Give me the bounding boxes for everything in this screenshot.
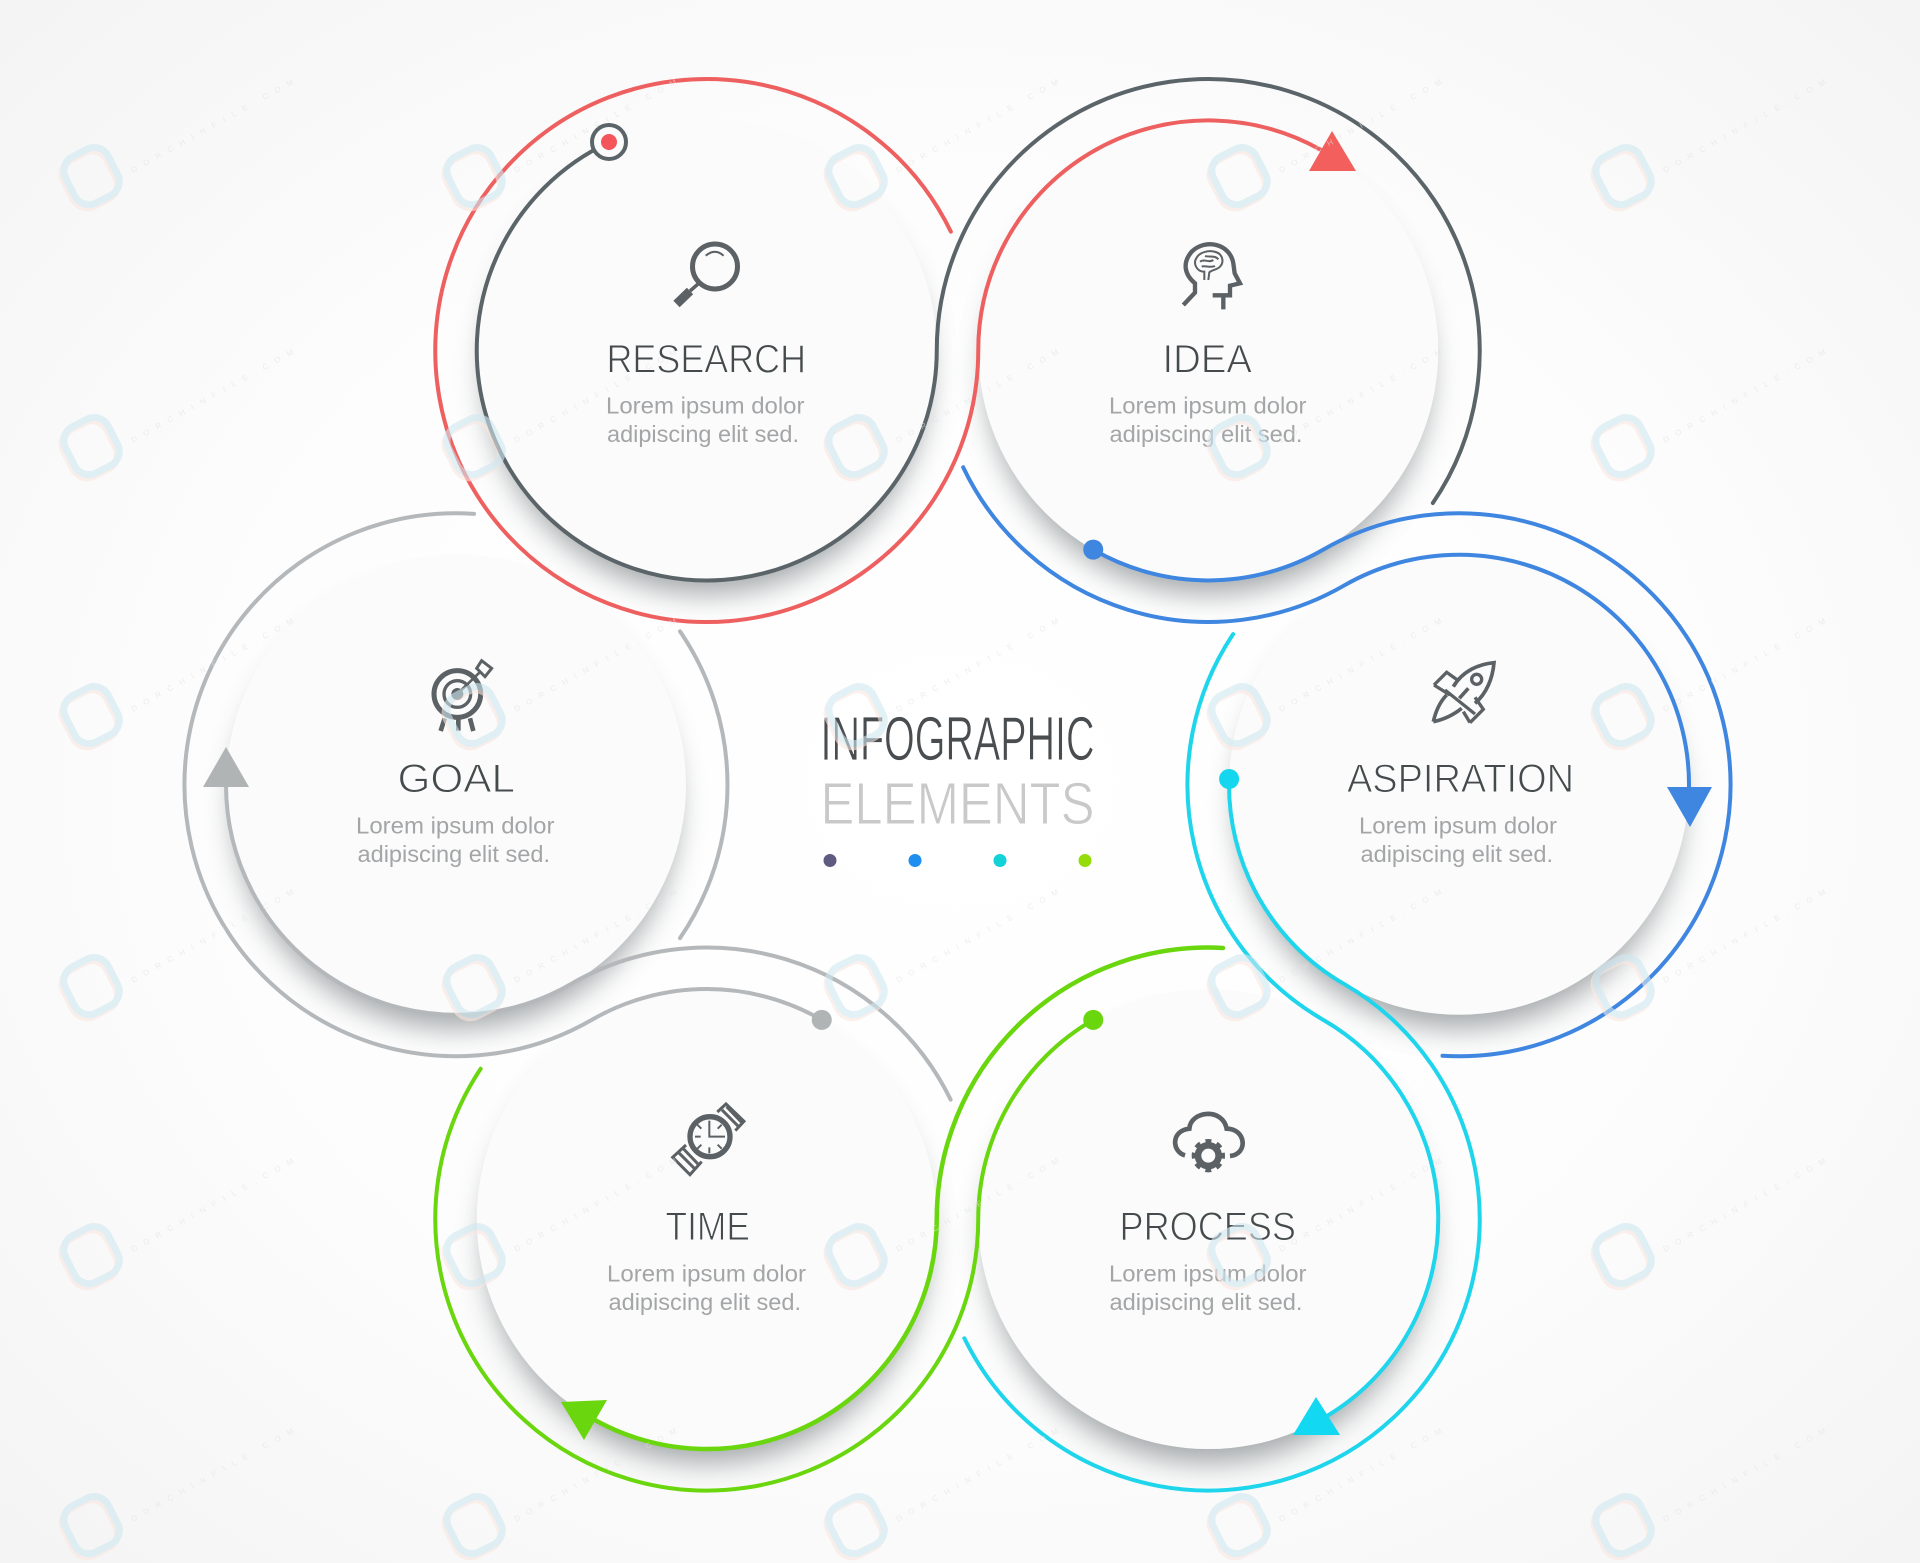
heading: goal: GOAL — [398, 757, 515, 801]
watermark grid: DORCHINFILE.COM — [130, 344, 302, 445]
marker: time start dot — [812, 1010, 832, 1030]
watermark grid: DORCHINFILE.COM — [895, 613, 1067, 714]
arrow: blue — [1667, 787, 1712, 827]
blue line: idea outer to aspiration inner — [963, 467, 1689, 790]
gray line: time inner to goal outer — [184, 513, 822, 1056]
watermark grid: DORCHINFILE.COM — [513, 884, 685, 985]
panel: idea — [1109, 244, 1307, 447]
disc: aspiration — [1229, 555, 1689, 1029]
panel: aspiration — [1347, 663, 1574, 867]
watermark grid: DORCHINFILE.COM — [130, 613, 302, 714]
text: time body: Lorem ipsum dolor — [607, 1261, 806, 1287]
heading: aspiration: ASPIRATION — [1347, 757, 1574, 801]
arrow: red — [1309, 131, 1356, 171]
watermark grid: DORCHINFILE.COM — [1662, 1153, 1834, 1254]
watermark grid: DORCHINFILE.COM — [895, 344, 1067, 445]
text: goal body: Lorem ipsum dolor — [356, 813, 555, 839]
heading: process: PROCESS — [1120, 1205, 1296, 1249]
icon: rocket — [1433, 663, 1494, 723]
watermark grid: DORCHINFILE.COM — [513, 344, 685, 445]
watermark grid: DORCHINFILE.COM — [513, 613, 685, 714]
disc: process — [978, 989, 1438, 1463]
marker: idea start dot — [1083, 540, 1103, 560]
panel: time — [607, 1104, 806, 1315]
blue line: idea inner to aspiration outer — [1093, 513, 1731, 1056]
watermark grid: DORCHINFILE.COM — [1662, 344, 1834, 445]
watermark grid: DORCHINFILE.COM — [1662, 1423, 1834, 1524]
watermark grid: DORCHINFILE.COM — [1278, 884, 1450, 985]
green line: process outer to time inner — [582, 948, 1223, 1449]
cyan line: aspiration outer to process inner — [1187, 634, 1438, 1415]
arrow: green — [561, 1400, 607, 1440]
center title — [820, 705, 1094, 867]
icon: magnifier — [676, 244, 738, 304]
watermark grid: DORCHINFILE.COM — [1662, 74, 1834, 175]
watermark grid: DORCHINFILE.COM — [130, 1153, 302, 1254]
watermark grid: DORCHINFILE.COM — [895, 1423, 1067, 1524]
watermark grid: DORCHINFILE.COM — [1662, 613, 1834, 714]
panel: research — [606, 244, 806, 447]
disc: time — [477, 989, 937, 1463]
disc: goal — [226, 555, 686, 1029]
panel: process — [1109, 1114, 1307, 1315]
gray arc: goal right side — [680, 631, 727, 938]
dark line: research inner to idea outer — [477, 79, 1480, 580]
watermark grid: DORCHINFILE.COM — [130, 884, 302, 985]
heading: time: TIME — [666, 1205, 750, 1249]
watermark grid: DORCHINFILE.COM — [130, 74, 302, 175]
text: idea body: Lorem ipsum dolor — [1109, 393, 1307, 419]
arrow: gray — [203, 747, 249, 787]
text: time body: adipiscing elit sed. — [608, 1289, 801, 1315]
cyan line: aspiration inner to process outer — [964, 779, 1480, 1491]
text: goal body: adipiscing elit sed. — [358, 841, 550, 867]
text: idea body: adipiscing elit sed. — [1110, 421, 1302, 447]
heading: research: RESEARCH — [606, 338, 806, 382]
watermark grid: DORCHINFILE.COM — [1278, 1153, 1450, 1254]
heading: elements: ELEMENTS — [820, 771, 1094, 837]
watermark grid: DORCHINFILE.COM — [1662, 884, 1834, 985]
watermark grid: DORCHINFILE.COM — [895, 74, 1067, 175]
red line: research outer to idea inner — [435, 79, 1320, 622]
watermark grid: DORCHINFILE.COM — [1278, 344, 1450, 445]
green line: process inner to time outer — [435, 1020, 1093, 1491]
heading: infographic: INFOGRAPHIC — [820, 705, 1094, 774]
icon: head with brain — [1183, 244, 1240, 309]
icon: wristwatch — [673, 1104, 744, 1175]
watermark grid: DORCHINFILE.COM — [513, 1423, 685, 1524]
gray line: time outer to goal inner — [226, 785, 951, 1100]
watermark grid: DORCHINFILE.COM — [895, 884, 1067, 985]
marker: process start dot — [1083, 1010, 1103, 1030]
disc: research — [477, 120, 937, 594]
watermark grid: DORCHINFILE.COM — [1278, 613, 1450, 714]
text: aspiration body: Lorem ipsum dolor — [1359, 813, 1557, 839]
marker: research start dot — [592, 125, 626, 159]
legend dots — [824, 854, 1092, 867]
marker: aspiration start dot — [1219, 769, 1239, 789]
panel: goal — [356, 661, 555, 867]
watermark grid: DORCHINFILE.COM — [1278, 74, 1450, 175]
text: research body: adipiscing elit sed. — [607, 421, 799, 447]
watermark grid: DORCHINFILE.COM — [513, 1153, 685, 1254]
icon: target with arrow — [434, 661, 492, 731]
arrow: cyan — [1293, 1397, 1340, 1435]
watermark grid: DORCHINFILE.COM — [895, 1153, 1067, 1254]
text: aspiration body: adipiscing elit sed. — [1360, 841, 1553, 867]
text: research body: Lorem ipsum dolor — [606, 393, 805, 419]
heading: idea: IDEA — [1162, 338, 1252, 382]
text: process body: Lorem ipsum dolor — [1109, 1261, 1307, 1287]
icon: cloud with gear — [1175, 1114, 1243, 1170]
watermark grid: DORCHINFILE.COM — [513, 74, 685, 175]
disc: idea — [978, 120, 1438, 594]
watermark grid: DORCHINFILE.COM — [1278, 1423, 1450, 1524]
watermark grid: DORCHINFILE.COM — [130, 1423, 302, 1524]
text: process body: adipiscing elit sed. — [1110, 1289, 1302, 1315]
